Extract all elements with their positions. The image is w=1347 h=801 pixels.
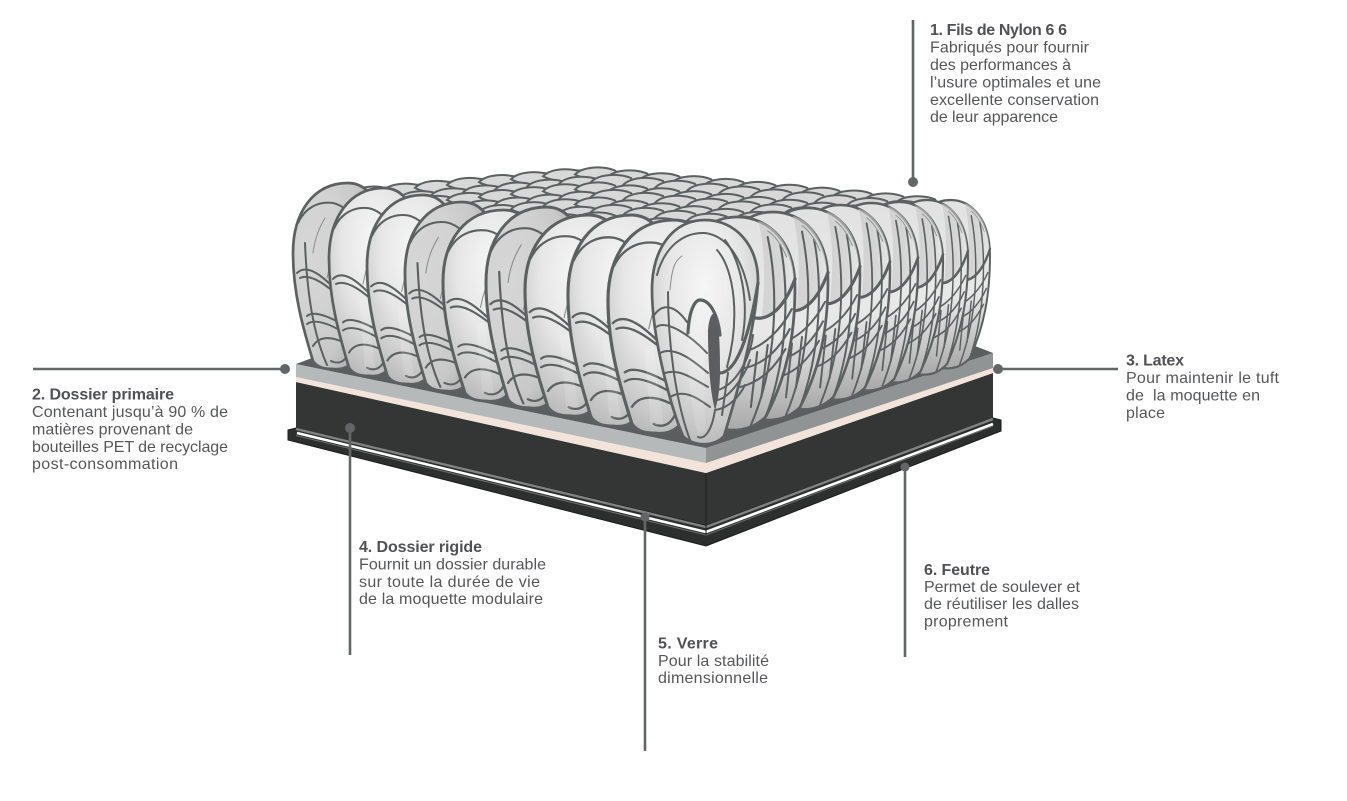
label: 3 latex: de la moquette en [1126,388,1260,404]
label: 3 latex: Pour maintenir le tuft [1126,370,1280,387]
label: 1 nylon yarns: 1. Fils de Nylon 6 6 [930,22,1067,39]
label: 6 felt: Permet de soulever et [924,579,1081,596]
label: 4 rigid backing [359,539,546,608]
label: 6 felt [924,562,1081,630]
label: 5 glass: Pour la stabilité [658,653,769,670]
label: 2 primary backing: matières provenant de [32,422,193,438]
top surface [296,300,993,448]
label: 1 nylon yarns: excellente conservation [930,92,1099,109]
label: 2 primary backing: 2. Dossier primaire [32,386,174,404]
rigid backing [296,373,993,525]
label: 5 glass: dimensionnelle [658,670,768,687]
leader: 1 nylon [908,20,918,187]
leader: 3 latex [993,364,1118,374]
label: 4 rigid backing: de la moquette modulaire [359,591,543,608]
label: 5 glass [658,636,769,687]
label: 4 rigid backing: 4. Dossier rigide [359,539,482,556]
primary backing left face [296,364,706,463]
label: 1 nylon yarns: des performances à [930,57,1071,74]
label: 1 nylon yarns: de leur apparence [930,109,1058,126]
leader: 5 glass [640,512,650,751]
latex layer [296,368,993,473]
label: 2 primary backing: post-consommation [32,456,178,473]
felt plate [288,418,1001,546]
label: 4 rigid backing: sur toute la durée de vie [359,574,540,591]
carpet tufts: front corner loop [652,220,758,444]
leader: 6 felt [900,462,910,657]
label: 1 nylon yarns: Fabriqués pour fournir [930,40,1090,56]
leader: 4 rigid backing [345,423,355,655]
label: 5 glass: 5. Verre [658,636,718,652]
carpet tufts: right row of loops [695,200,990,430]
label: 4 rigid backing: Fournit un dossier durable [359,556,546,574]
leader: 2 primary backing [33,364,290,374]
label: 1 nylon yarns: l’usure optimales et une [930,74,1101,92]
label: 2 primary backing: bouteilles PET de recyclage [32,439,228,456]
label: 2 primary backing [32,386,228,473]
label: 6 felt: proprement [924,614,1009,630]
label: 2 primary backing: Contenant jusqu’à 90 % de [32,404,228,421]
glass layer [296,419,993,535]
label: 6 felt: 6. Feutre [924,562,990,579]
label: 6 felt: de réutiliser les dalles [924,596,1079,613]
carpet tufts: woven back lattice [319,167,952,268]
carpet tufts: left row of loops [293,183,714,433]
primary backing right face [706,353,993,463]
label: 3 latex: place [1126,405,1165,422]
label: 3 latex: 3. Latex [1126,352,1184,370]
label: 3 latex [1126,352,1280,422]
label: 1 nylon yarns [930,22,1101,126]
tile base: top surface, layers and felt [288,300,1001,546]
